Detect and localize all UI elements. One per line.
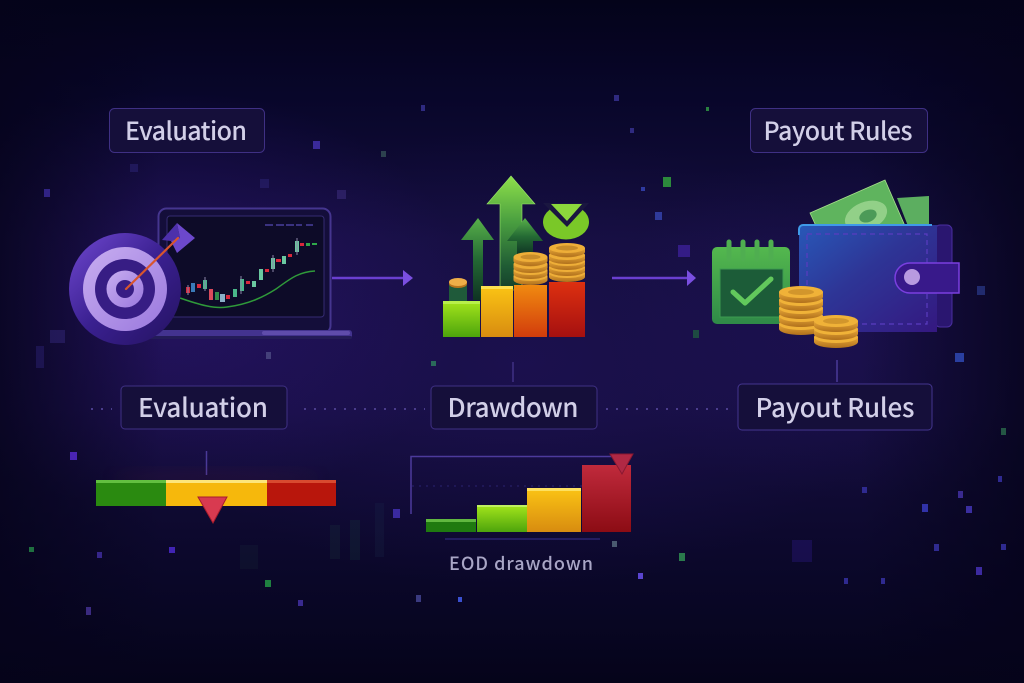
icon: banknotes <box>810 180 929 237</box>
panel: payout rules label <box>738 384 932 430</box>
icon: wallet <box>799 225 959 332</box>
panel: evaluation label: Evaluation <box>138 388 268 425</box>
panel: payout rules header: Payout Rules <box>764 112 912 148</box>
background particles <box>29 95 1006 615</box>
icon: target with arrow <box>69 223 195 345</box>
chart: EOD drawdown bars <box>411 454 633 539</box>
connector: payout icon to label <box>836 360 838 382</box>
panel: payout rules header <box>750 108 928 152</box>
panel: drawdown label <box>431 386 597 429</box>
icon: calendar with check <box>712 242 790 324</box>
icon: wallet with cash, calendar and coins <box>712 180 959 348</box>
icon: coin stack small <box>814 315 858 348</box>
dotted connector line <box>91 408 728 410</box>
icon: green arrows <box>461 176 543 300</box>
coin stack red <box>549 243 585 282</box>
chart: candlesticks <box>186 238 317 302</box>
coin stack orange <box>514 252 548 285</box>
panel: evaluation header <box>110 108 264 152</box>
panel: evaluation header: Evaluation <box>125 112 247 148</box>
panel: evaluation label <box>121 386 287 429</box>
gauge marker <box>198 497 227 523</box>
gauge: risk bar <box>96 472 336 523</box>
panel: payout rules label: Payout Rules <box>756 388 914 425</box>
arrow: evaluation to drawdown <box>332 270 413 286</box>
icon: laptop with candlestick chart <box>150 208 352 339</box>
icon: growth arrows and bars <box>443 176 589 337</box>
icon: down-arrow badge <box>543 203 589 240</box>
bars <box>443 282 585 337</box>
connector: drawdown icon to label <box>512 362 514 382</box>
panel: drawdown label: Drawdown <box>448 388 578 425</box>
icon: coin stack large <box>779 286 823 335</box>
caption: EOD drawdown: EOD drawdown <box>449 550 593 576</box>
arrow: drawdown to payout <box>612 270 696 286</box>
connector: evaluation label to gauge <box>206 451 208 475</box>
chart marker <box>610 454 633 474</box>
small coin <box>449 278 467 301</box>
chart: moving average line <box>180 271 315 308</box>
